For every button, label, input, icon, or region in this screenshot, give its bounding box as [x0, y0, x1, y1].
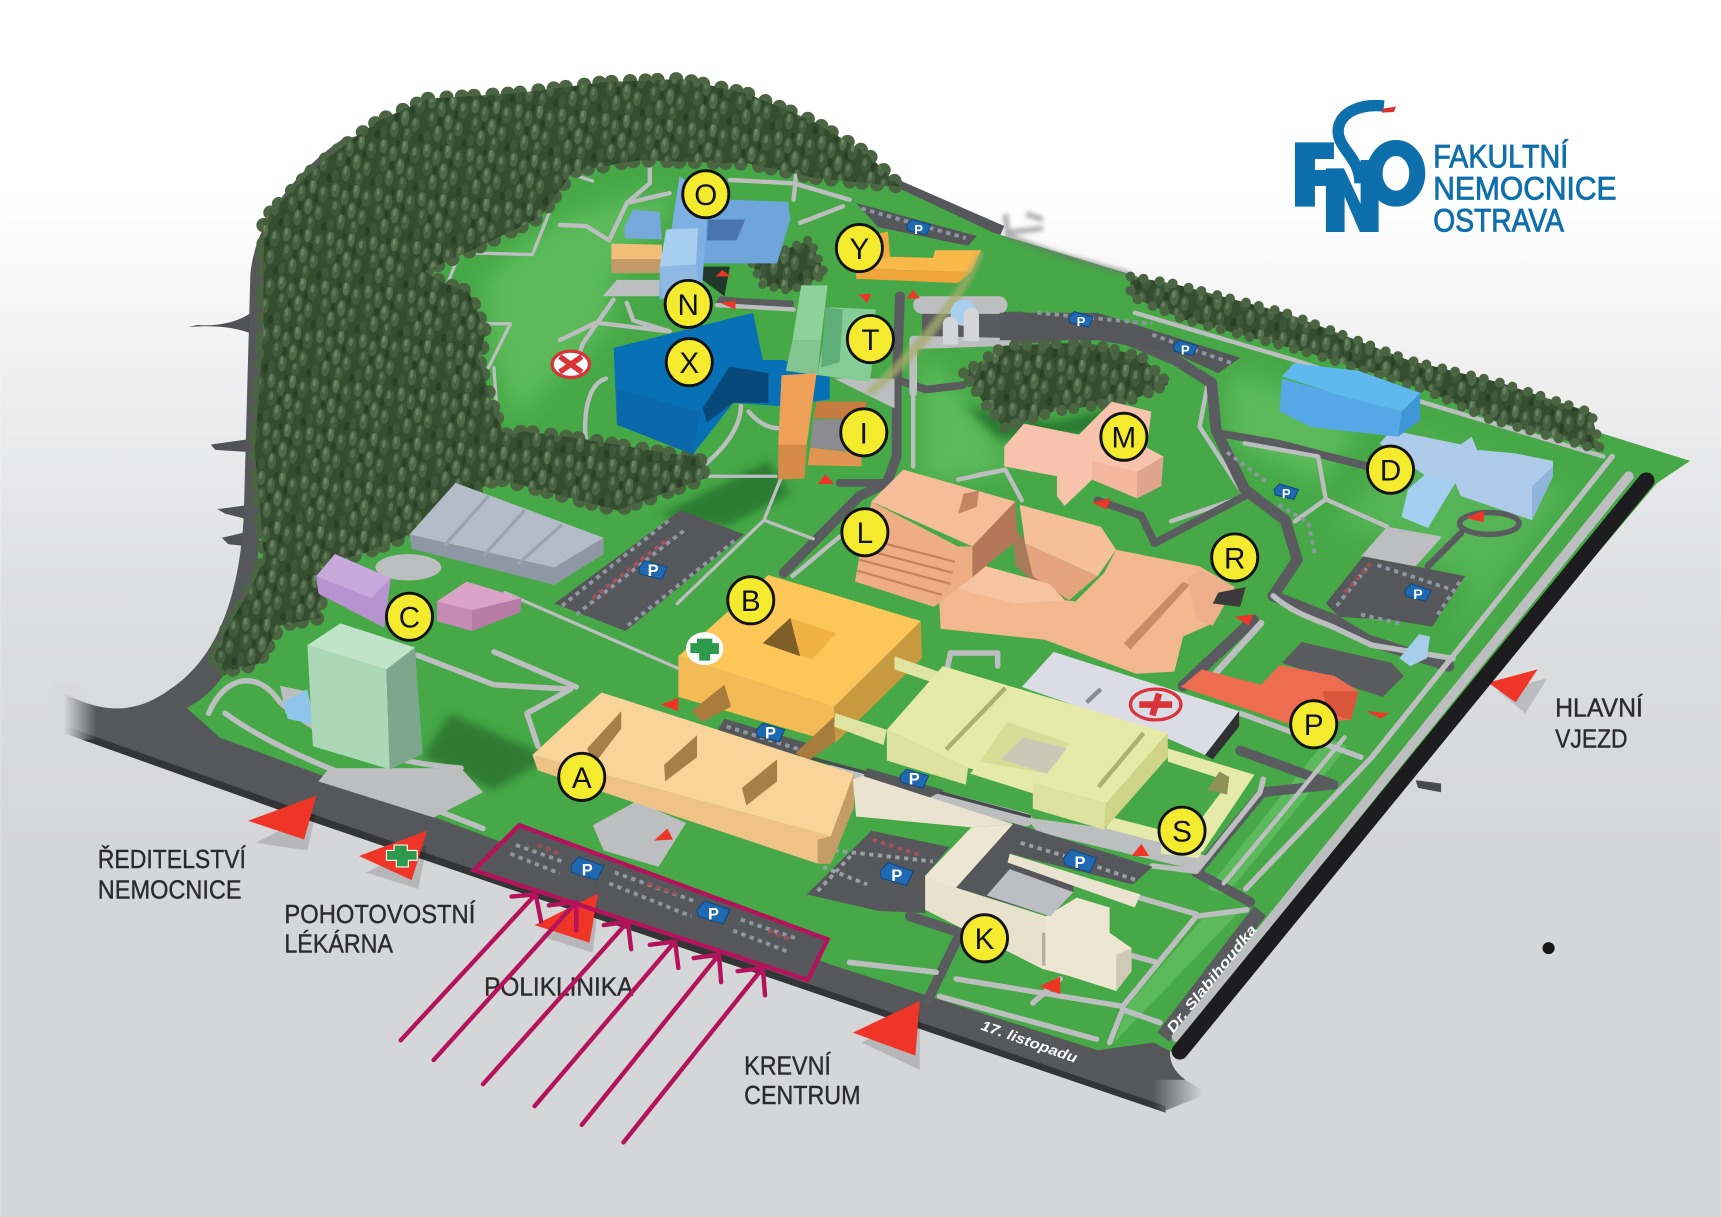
building: grey hangars: [409, 483, 604, 585]
building M: [1004, 402, 1163, 506]
parking signs: P: [909, 771, 920, 789]
logo: Fakultní nemocnice Ostrava: NEMOCNICE: [1433, 170, 1617, 206]
label: hlavní vjezd: HLAVNÍ: [1555, 693, 1644, 723]
building letter markers: O: [694, 179, 717, 212]
label: krevní centrum: CENTRUM: [744, 1080, 860, 1110]
label: hlavní vjezd: VJEZD: [1555, 723, 1628, 753]
building Y: [856, 232, 983, 395]
building A: [532, 692, 854, 864]
tree clusters: [752, 239, 1600, 450]
label: krevní centrum: [744, 1050, 860, 1110]
building letter markers: A: [572, 762, 592, 795]
building letter markers: S: [1172, 816, 1192, 849]
lawns and shading: [423, 196, 1569, 1043]
building: upper blue block: [1280, 363, 1420, 437]
building C purple and pink: [316, 554, 521, 631]
parking signs: P: [1074, 854, 1085, 872]
building D: [1380, 430, 1553, 528]
parking signs: P: [1181, 342, 1190, 357]
red arrow: krevní centrum: [853, 1001, 920, 1070]
label: pohotovostní lékárna: POHOTOVOSTNÍ: [284, 899, 476, 929]
parking signs: P: [914, 222, 923, 237]
road label: Dr. Slabihoudka: Dr. Slabihoudka: [1164, 922, 1261, 1036]
building letter markers: X: [679, 347, 699, 380]
parking lots: [476, 203, 1465, 979]
building B: [678, 575, 922, 762]
building T: [786, 285, 876, 382]
red arrow: pohotovostní lékárna: [359, 831, 427, 889]
parking signs: P: [1413, 587, 1423, 603]
building letter markers: K: [975, 923, 995, 956]
parking signs: P: [648, 562, 659, 580]
red arrow: hlavní vjezd: [1488, 669, 1547, 713]
parking signs: [571, 219, 1431, 924]
label: ředitelství nemocnice: [98, 844, 247, 905]
building letter markers: D: [1380, 455, 1401, 488]
Dr. Slabihoudka black road: [1180, 481, 1646, 1051]
internal roads: [716, 296, 1519, 1037]
building I: [778, 373, 867, 480]
parking signs: P: [582, 862, 593, 880]
building O: [611, 177, 790, 300]
red arrow: poliklinika: [535, 893, 598, 953]
label: ředitelství nemocnice: ŘEDITELSTVÍ: [98, 844, 247, 874]
label: poliklinika: POLIKLINIKA: [484, 971, 634, 1001]
building P: [1181, 665, 1359, 724]
pharmacy marker: [686, 632, 723, 665]
arrows to poliklinika parking: [401, 894, 765, 1142]
helipad marker: [552, 351, 589, 378]
building S: [834, 656, 1254, 858]
label: krevní centrum: KREVNÍ: [744, 1050, 831, 1080]
building X: [614, 313, 830, 454]
building letter markers: T: [861, 324, 879, 357]
label: pohotovostní lékárna: LÉKÁRNA: [284, 929, 393, 959]
building letter markers: N: [678, 289, 699, 322]
building letter markers: [386, 171, 1414, 962]
parking signs: P: [1282, 486, 1291, 501]
emergency block with helipad cross: [1022, 652, 1239, 759]
logo: Fakultní nemocnice Ostrava: OSTRAVA: [1433, 203, 1564, 239]
parked cars: [510, 209, 1460, 953]
label: hlavní vjezd: [1555, 693, 1644, 753]
building letter markers: I: [860, 417, 868, 450]
road end fades: [53, 683, 1220, 1119]
building letter markers: R: [1224, 542, 1245, 575]
building letter markers: M: [1112, 422, 1136, 455]
building: pale green tower: [283, 623, 423, 769]
forest: [214, 79, 900, 672]
parking signs: P: [891, 867, 902, 885]
silos: [943, 300, 979, 345]
red arrow: ředitelství: [248, 796, 316, 850]
parking signs: P: [765, 725, 776, 743]
building letter markers: B: [741, 585, 761, 618]
label: pohotovostní lékárna: [284, 899, 476, 959]
building letter markers: L: [857, 517, 873, 550]
building letter markers: Y: [850, 233, 870, 266]
building L: [855, 470, 1246, 674]
small entrance arrows: [654, 270, 1484, 994]
footpaths: [209, 167, 1629, 1043]
campus ground: [187, 110, 1690, 1053]
callout: poliklinika parking box: [474, 825, 828, 980]
road label: 17. listopadu: 17. listopadu: [979, 1018, 1080, 1067]
building letter markers: P: [1304, 709, 1324, 742]
building K with corridor: [853, 776, 1140, 991]
building letter markers: C: [399, 602, 420, 635]
logo: Fakultní nemocnice Ostrava: [1295, 106, 1617, 239]
parking signs: P: [1077, 314, 1086, 329]
small road detail: [1416, 780, 1441, 792]
isolated dot: [1543, 942, 1555, 954]
small clinic building near entrance: [1399, 634, 1430, 666]
parking signs: P: [708, 906, 719, 924]
ghost marks beyond the north road: [1004, 214, 1130, 274]
logo: Fakultní nemocnice Ostrava: FAKULTNÍ: [1433, 138, 1568, 174]
perimeter roads: [61, 101, 1209, 1113]
label: ředitelství nemocnice: NEMOCNICE: [98, 875, 242, 905]
